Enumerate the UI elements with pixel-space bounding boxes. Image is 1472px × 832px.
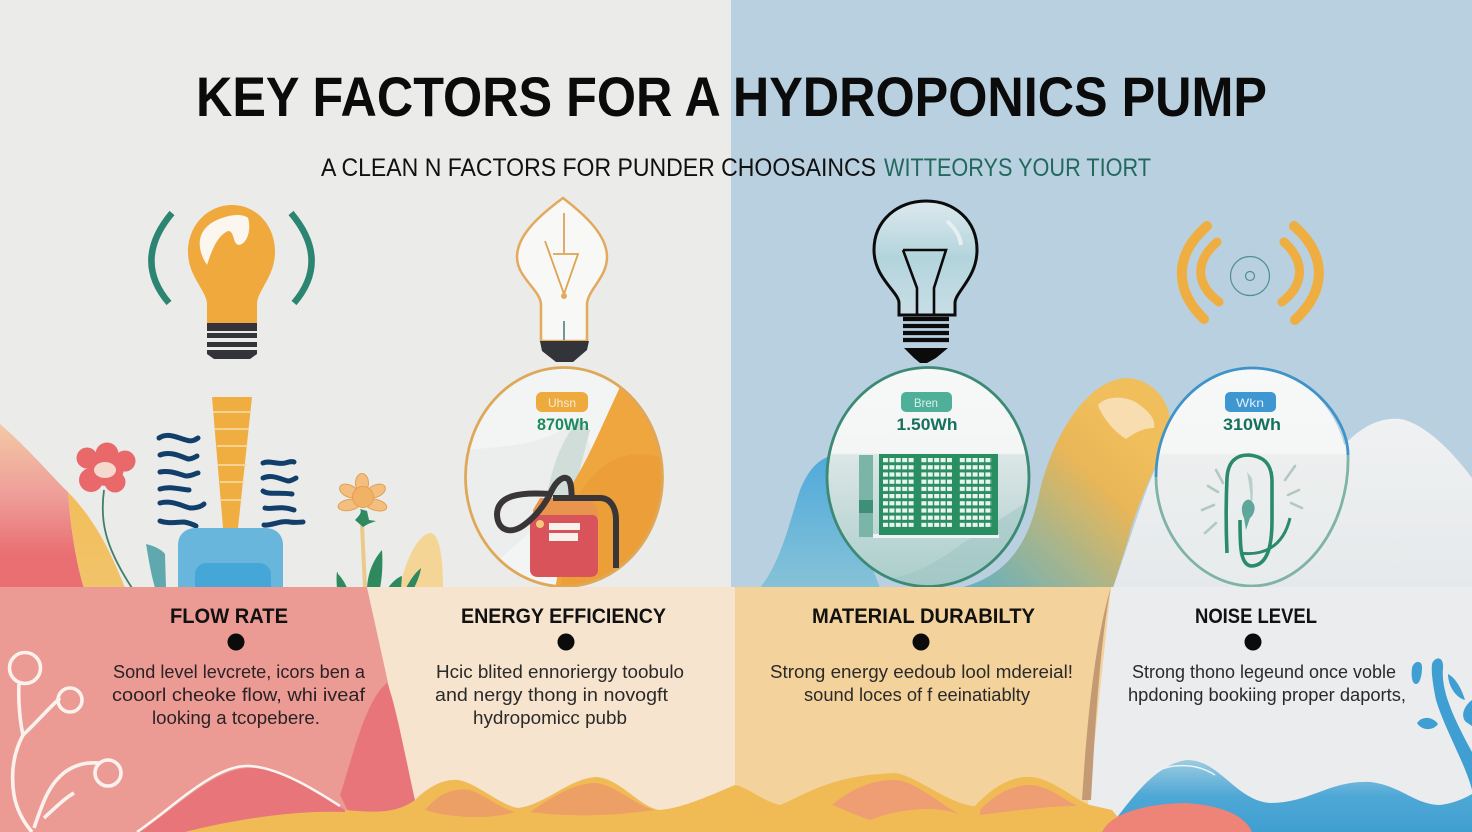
text: noise level: hpdoning bookiing proper daports, <box>1128 685 1406 705</box>
heading: material durability: MATERIAL DURABILTY <box>812 605 1035 628</box>
right tall yellow hill <box>960 378 1170 588</box>
bubble: material durability <box>826 368 1030 600</box>
icon: red pump with cord <box>497 478 616 577</box>
icon: noise sound rings <box>1182 226 1319 320</box>
title: KEY FACTORS FOR A HYDROPONICS PUMP <box>196 65 1267 128</box>
bubble: noise level <box>1156 368 1348 586</box>
text: energy efficiency: and nergy thong in novogft <box>435 685 668 705</box>
pill label 4: Wkn <box>1236 396 1264 410</box>
pink wave <box>137 766 415 832</box>
background left <box>0 0 731 832</box>
value 4: 310Wh <box>1223 415 1281 434</box>
yellow waves <box>185 773 1130 832</box>
background right <box>731 0 1472 832</box>
left pink hill <box>0 424 84 588</box>
right white hill <box>1113 419 1472 588</box>
text: flow rate: looking a tcopebere. <box>152 708 320 728</box>
text: noise level: Strong thono legeund once voble <box>1132 662 1396 682</box>
text: material durability: sound loces of f eeinatiablty <box>804 685 1030 705</box>
icon: quiet pump outline <box>1202 455 1302 566</box>
icon: water waves left <box>159 435 204 526</box>
pill label 3 <box>901 392 952 412</box>
pill label 2 <box>536 392 588 412</box>
panel: material durability <box>735 587 1111 832</box>
icon: blue plant <box>1412 658 1472 790</box>
bubble: energy efficiency <box>465 368 670 590</box>
left yellow hill <box>68 492 125 588</box>
hill highlight <box>1098 398 1154 439</box>
subtitle: A CLEAN N FACTORS FOR PUNDER CHOOSAINCS <box>321 154 876 182</box>
panel: energy efficiency <box>367 587 735 832</box>
value 3: 1.50Wh <box>896 415 958 434</box>
pink blob <box>1102 803 1252 832</box>
icon: orange flower <box>337 474 388 588</box>
text: material durability <box>770 662 1073 705</box>
text: flow rate: cooorl cheoke flow, whi iveaf <box>112 685 366 705</box>
bullet 1 <box>228 634 244 650</box>
pill label 4 <box>1225 392 1276 412</box>
pink peak behind waves <box>340 683 415 820</box>
icon: orange light bulb with arcs <box>151 205 312 359</box>
icon: water waves right <box>263 462 303 525</box>
panel: flow rate <box>0 587 421 832</box>
panel: noise level <box>1085 587 1472 832</box>
text: energy efficiency: Hcic blited ennoriergy toobulo <box>436 662 684 682</box>
text: energy efficiency: hydropomicc pubb <box>473 708 627 728</box>
heading: noise level: NOISE LEVEL <box>1195 605 1317 628</box>
subtitle: WITTEORYS YOUR TIORT <box>884 154 1151 182</box>
panel divider strip <box>1082 587 1111 800</box>
text: material durability: Strong energy eedoub lool mdereial! <box>770 662 1073 682</box>
text: noise level <box>1128 662 1406 705</box>
icon: leaves and pale hill <box>337 533 443 588</box>
heading: flow rate: FLOW RATE <box>170 605 288 628</box>
text: flow rate: Sond level levcrete, icors ben a <box>113 662 366 682</box>
text: energy efficiency <box>435 662 684 728</box>
pill label 3: Bren <box>914 396 938 410</box>
left blue hill <box>760 456 880 588</box>
value 2: 870Wh <box>537 415 589 434</box>
bullet 4 <box>1244 634 1262 650</box>
bullet 2 <box>558 634 574 650</box>
text: flow rate <box>112 662 366 728</box>
icon: pump outlet cone <box>212 397 252 528</box>
pill label 2: Uhsn <box>548 396 576 410</box>
icon: teal-black bulb <box>874 201 977 363</box>
icon: teal leaf <box>146 544 166 588</box>
bullet 3 <box>912 634 930 650</box>
icon: white plant <box>10 652 121 832</box>
heading: energy efficiency: ENERGY EFFICIENCY <box>461 605 666 628</box>
icon: outline bulb <box>517 198 607 362</box>
icon: red flower <box>76 442 136 588</box>
icon: green filter panel <box>859 454 999 538</box>
blue wave <box>1105 760 1472 832</box>
icon: blue pump body <box>178 528 283 588</box>
